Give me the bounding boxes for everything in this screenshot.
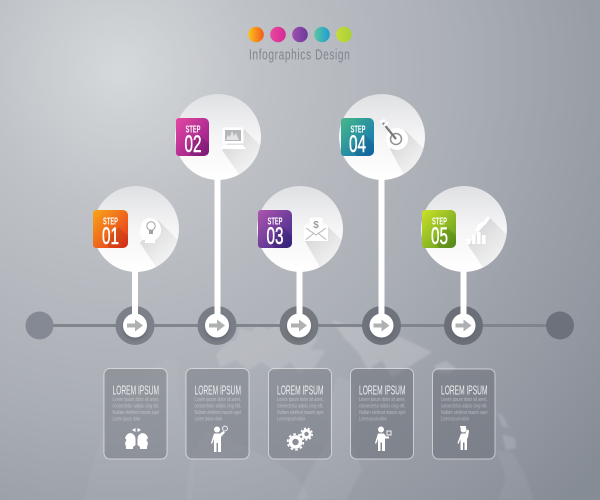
stem bbox=[214, 173, 220, 317]
icon: two heads bbox=[125, 428, 148, 449]
step badge bbox=[258, 210, 292, 248]
step number: 01 bbox=[102, 223, 119, 250]
card body text: Lorem ipsum dolor sit amet, bbox=[194, 397, 241, 403]
stem bbox=[460, 265, 466, 317]
step 1 bbox=[93, 186, 185, 345]
card 2 bbox=[186, 368, 249, 459]
node bbox=[123, 314, 147, 338]
card body text: consectetur adipis cing elit. bbox=[441, 404, 488, 410]
arrow bbox=[291, 320, 307, 332]
step label: STEP bbox=[186, 124, 201, 136]
stem bbox=[132, 265, 138, 317]
arrow bbox=[456, 320, 472, 332]
node shadow bbox=[204, 316, 230, 340]
card 4 bbox=[350, 368, 414, 459]
step badge bbox=[176, 118, 209, 156]
disc bbox=[339, 94, 425, 180]
node shadow bbox=[451, 316, 476, 340]
card 1 bbox=[104, 368, 167, 459]
card 5 bbox=[432, 369, 495, 459]
step number: 04 bbox=[349, 131, 366, 158]
card panel bbox=[104, 368, 167, 459]
node ring bbox=[280, 306, 318, 345]
card body text: Lorem ipsum dolor bbox=[277, 416, 305, 422]
node ring bbox=[362, 306, 401, 345]
card body text bbox=[359, 397, 406, 422]
card body text: Lorem ipsum dolor bbox=[441, 416, 469, 422]
left end dot bbox=[26, 312, 54, 340]
long shadow bbox=[305, 227, 342, 267]
card panel bbox=[432, 369, 495, 459]
icon: envelope with money bbox=[304, 217, 328, 241]
card panel bbox=[350, 368, 414, 459]
card 3 bbox=[268, 368, 332, 459]
node ring bbox=[198, 306, 236, 345]
disc bbox=[93, 186, 179, 272]
step number: 02 bbox=[184, 131, 202, 158]
timeline bbox=[26, 312, 574, 340]
long shadow bbox=[468, 218, 506, 267]
icon: person with bulb bbox=[211, 426, 227, 452]
icon: envelope with money: $ bbox=[313, 220, 319, 231]
card heading: LOREM IPSUM bbox=[441, 384, 488, 398]
colour dots bbox=[248, 27, 352, 42]
arrow bbox=[209, 320, 225, 332]
step label: STEP bbox=[268, 216, 283, 228]
step 2 bbox=[175, 94, 270, 345]
disc bbox=[257, 186, 343, 272]
icon: gears bbox=[288, 428, 312, 450]
card heading: LOREM IPSUM bbox=[277, 384, 324, 398]
step 4 bbox=[339, 94, 425, 345]
node bbox=[287, 314, 311, 338]
icon: person with tablet bbox=[375, 426, 391, 451]
step label: STEP bbox=[350, 124, 366, 136]
card heading: LOREM IPSUM bbox=[112, 384, 159, 398]
card body text: Nullam eleifend mauris eget bbox=[112, 410, 159, 416]
badge shade bbox=[432, 227, 456, 248]
step label: STEP bbox=[432, 216, 447, 228]
card body text: consectetur adipis cing elit. bbox=[194, 404, 241, 410]
title: Infographics Design bbox=[249, 47, 350, 63]
card body text bbox=[194, 397, 241, 422]
card body text: Lorem ipsum dolor bbox=[359, 416, 387, 422]
node ring bbox=[116, 306, 154, 345]
node bbox=[452, 314, 476, 338]
card body text: consectetur adipis cing elit. bbox=[359, 404, 406, 410]
icon: head with bulb bbox=[139, 218, 161, 243]
world map bbox=[84, 318, 534, 500]
card body text bbox=[441, 397, 488, 422]
arrow bbox=[374, 320, 390, 332]
stem bbox=[296, 265, 302, 317]
step badge bbox=[422, 210, 456, 248]
card body text: Lorem ipsum dolor bbox=[112, 416, 141, 422]
step number: 03 bbox=[266, 223, 284, 250]
arrow bbox=[127, 320, 143, 332]
card heading: LOREM IPSUM bbox=[194, 384, 241, 398]
disc bbox=[175, 94, 261, 180]
card body text: Lorem ipsum dolor bbox=[194, 416, 223, 422]
card panel bbox=[186, 368, 249, 459]
card body text bbox=[112, 397, 159, 422]
stem bbox=[378, 173, 384, 317]
card body text: Lorem ipsum dolor sit amet, bbox=[112, 397, 159, 403]
icon: laptop bbox=[220, 128, 246, 149]
header: colour dots and title bbox=[248, 27, 352, 63]
card body text bbox=[277, 397, 324, 422]
node shadow bbox=[369, 316, 394, 340]
right end dot bbox=[546, 312, 574, 340]
step badge bbox=[93, 210, 128, 248]
badge shade bbox=[350, 135, 374, 156]
badge shade bbox=[185, 135, 209, 156]
icon: hand and bar chart bbox=[467, 216, 490, 244]
card body text: Lorem ipsum dolor sit amet, bbox=[359, 397, 406, 403]
long shadow bbox=[390, 130, 423, 174]
card body text: Nullam eleifend mauris eget bbox=[359, 410, 406, 416]
badge shade bbox=[103, 227, 128, 248]
step number: 05 bbox=[431, 223, 448, 250]
card body text: Nullam eleifend mauris eget bbox=[194, 410, 241, 416]
card body text: Nullam eleifend mauris eget bbox=[441, 410, 488, 416]
long shadow bbox=[222, 128, 260, 174]
card body text: Lorem ipsum dolor sit amet, bbox=[277, 397, 324, 403]
card heading: LOREM IPSUM bbox=[359, 384, 406, 398]
node shadow bbox=[122, 316, 148, 340]
node ring bbox=[444, 306, 483, 345]
node bbox=[370, 314, 394, 338]
disc bbox=[421, 186, 507, 272]
card body text: consectetur adipis cing elit. bbox=[112, 404, 159, 410]
card panel bbox=[268, 368, 332, 459]
long shadow bbox=[140, 220, 178, 266]
node shadow bbox=[286, 316, 312, 340]
card body text: Nullam eleifend mauris eget bbox=[277, 410, 324, 416]
icon: target and dart bbox=[380, 120, 408, 150]
step badge bbox=[341, 118, 374, 156]
step 5 bbox=[421, 186, 507, 345]
card body text: consectetur adipis cing elit. bbox=[277, 404, 324, 410]
step 3 bbox=[257, 186, 352, 345]
card body text: Lorem ipsum dolor sit amet, bbox=[441, 397, 488, 403]
timeline line bbox=[39, 324, 560, 327]
icon: person on phone bbox=[458, 426, 469, 450]
step label: STEP bbox=[103, 216, 118, 228]
node bbox=[205, 314, 229, 338]
badge shade bbox=[268, 227, 292, 248]
